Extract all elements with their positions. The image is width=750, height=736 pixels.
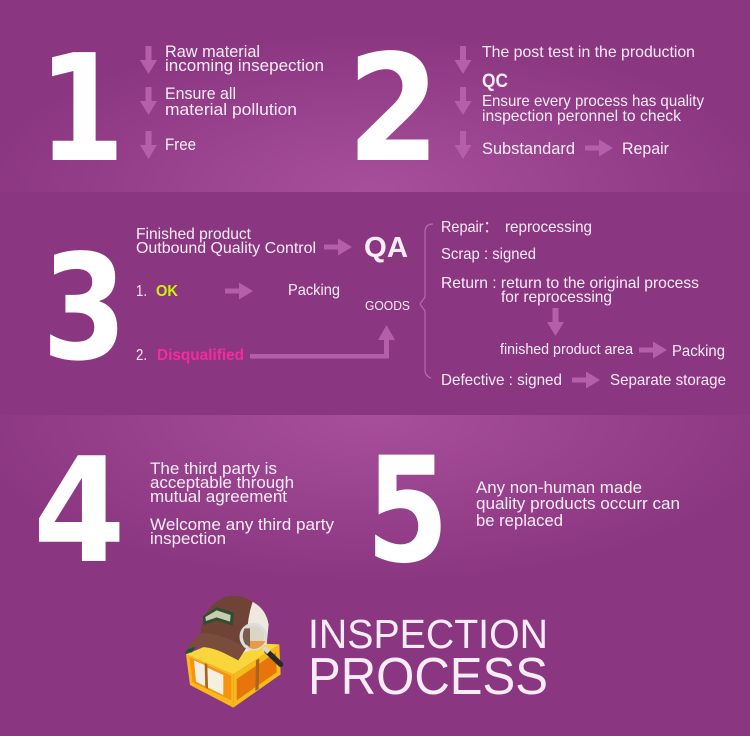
- step 4 text: inspection: [150, 529, 226, 548]
- step 5 text: Any non-human made: [476, 478, 642, 497]
- step 4 text: acceptable through: [150, 473, 294, 492]
- step 3 right text: Return : return to the original process: [441, 275, 699, 292]
- number 2: 2: [347, 23, 440, 195]
- step 3 right text: reprocessing: [505, 219, 592, 236]
- step 2 text: inspection peronnel to check: [482, 108, 682, 125]
- step 3 left text: OK: [156, 283, 178, 300]
- panel: step 2: [347, 23, 704, 195]
- step 3 right text: Packing: [672, 343, 725, 360]
- box: [186, 642, 281, 708]
- brace: [420, 224, 433, 378]
- step 1 text: Ensure all: [165, 84, 236, 103]
- step 1 arrows: [140, 46, 157, 159]
- step 3 right arrows: [547, 308, 667, 388]
- step 3 right text: for reprocessing: [501, 289, 612, 306]
- step 3 right text: [441, 219, 726, 389]
- panel: step 3: [42, 219, 726, 394]
- number 4: 4: [33, 427, 126, 596]
- step 2 down arrows: [454, 46, 472, 159]
- step 5 text: be replaced: [476, 511, 563, 530]
- step 3 left arrows: [225, 238, 395, 358]
- step 3 left text: Finished product: [136, 226, 252, 243]
- number 5: 5: [366, 426, 449, 596]
- step 1 text: Free: [165, 135, 196, 154]
- step 5 text: quality products occurr can: [476, 494, 680, 513]
- number 3: 3: [42, 224, 127, 394]
- step 3 right text: finished product area: [500, 341, 634, 358]
- icon: box with cap and magnifier: [185, 596, 281, 708]
- step 3 left text: Outbound Quality Control: [136, 240, 316, 257]
- panel: step 4: [33, 427, 335, 596]
- step 1 text: Raw material: [165, 42, 260, 61]
- step 3 left text: QA: [364, 232, 408, 264]
- step 1 text: incoming insepection: [165, 56, 324, 75]
- step 3 left text: GOODS: [365, 298, 410, 313]
- step 3 left text: [136, 226, 410, 364]
- number 1: 1: [38, 23, 125, 195]
- step 4 text: [150, 459, 335, 548]
- title: PROCESS: [308, 648, 548, 706]
- step 3 left text: 1.: [136, 283, 147, 300]
- step 2 text: [482, 44, 704, 158]
- title: INSPECTION: [308, 611, 548, 657]
- step 3 right text: Scrap : signed: [441, 246, 536, 263]
- step 2 text: Substandard: [482, 139, 575, 158]
- step 4 text: The third party is: [150, 459, 277, 478]
- magnifier: [241, 624, 281, 664]
- step 1 text: material pollution: [165, 100, 297, 119]
- step 3 left text: Packing: [288, 282, 340, 299]
- title: [308, 611, 548, 706]
- step 2 text: Repair: [622, 139, 669, 158]
- panel: step 1: [38, 23, 324, 195]
- step 3 right text: Repair：: [441, 219, 498, 236]
- step 3 left text: 2.: [136, 347, 147, 364]
- cap: [185, 596, 269, 660]
- arrow: substandard to repair: [585, 140, 613, 156]
- step 3 right text: Defective : signed: [441, 372, 562, 389]
- step 3 left text: Disqualified: [157, 347, 244, 364]
- panel: step 5: [366, 426, 680, 596]
- step 2 text: QC: [482, 71, 508, 92]
- step 5 text: [476, 478, 680, 530]
- step 3 right text: Separate storage: [610, 372, 726, 389]
- step 2 text: Ensure every process has quality: [482, 93, 704, 110]
- step 4 text: Welcome any third party: [150, 515, 335, 534]
- step 4 text: mutual agreement: [150, 487, 287, 506]
- step 2 text: The post test in the production: [482, 44, 695, 61]
- step 1 text: [165, 42, 324, 154]
